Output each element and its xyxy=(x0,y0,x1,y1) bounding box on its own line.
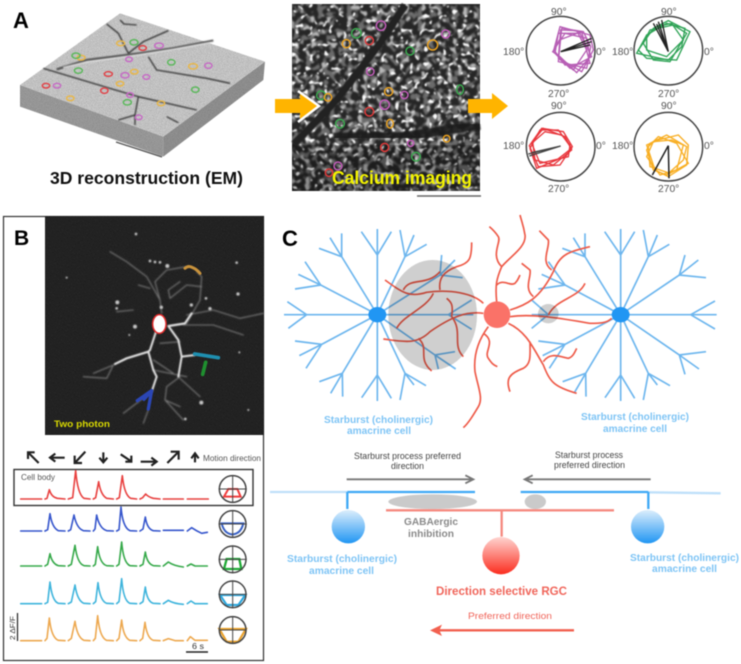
trace: green xyxy=(21,542,207,567)
top label: left starburst: amacrine cell xyxy=(347,426,411,437)
top label: right starburst xyxy=(581,412,689,435)
label: starburst process left xyxy=(354,451,461,471)
cell body highlight box xyxy=(14,470,253,506)
tuning icon: red xyxy=(219,475,247,503)
inhibition synapse: left xyxy=(388,494,477,509)
panel B frame xyxy=(4,216,264,660)
label: Cell body: Cell body xyxy=(21,472,56,482)
direction selective ganglion cell xyxy=(383,215,612,428)
label: lower right starburst: Starburst (cholinergic) xyxy=(630,553,739,564)
motion direction arrows xyxy=(28,452,199,466)
starburst processes xyxy=(270,492,721,509)
label B: B xyxy=(14,227,29,250)
label: Direction selective RGC: Direction selective RGC xyxy=(436,584,567,598)
label: lower right starburst: amacrine cell xyxy=(652,564,717,575)
dendrite schematic xyxy=(284,215,717,428)
starburst soma: left xyxy=(332,510,365,543)
label: starburst process right: Starburst process xyxy=(555,450,624,460)
circuit cross-section xyxy=(270,475,721,636)
polar angle labels: 0° xyxy=(596,141,606,152)
polar angle labels: 90° xyxy=(551,101,567,112)
two photon micrograph xyxy=(45,216,264,435)
caption: 3D reconstruction: 3D reconstruction (EM) xyxy=(50,168,243,188)
top label: left starburst: Starburst (cholinergic) xyxy=(324,415,433,426)
label: GABAergic inhibition: GABAergic xyxy=(404,516,458,528)
polar angle labels: 180° xyxy=(503,47,524,58)
cell body xyxy=(153,315,166,333)
trace: red cell body xyxy=(21,471,208,499)
inhibition zone: small xyxy=(538,304,559,323)
label: starburst process right xyxy=(554,450,625,470)
top label: left starburst xyxy=(324,415,433,437)
top label: right starburst: Starburst (cholinergic) xyxy=(581,412,689,423)
trace: blue xyxy=(21,507,207,533)
calcium scale bar xyxy=(417,195,481,197)
tuning icon: orange xyxy=(219,616,247,644)
calcium traces xyxy=(21,471,208,641)
tuning icons xyxy=(219,475,247,644)
label: starburst process left: Starburst process preferred xyxy=(354,451,461,461)
tuning icon: green xyxy=(219,545,247,573)
EM 3D block xyxy=(20,13,265,157)
inhibition synapse: right xyxy=(525,494,546,509)
label: starburst process left: direction xyxy=(391,461,424,471)
starburst cell: left xyxy=(284,229,473,401)
polar plot: orange xyxy=(634,112,703,181)
arrow: EM to calcium xyxy=(275,92,318,119)
caption: Two photon: Two photon xyxy=(54,419,110,430)
polar angle labels: 0° xyxy=(704,47,714,58)
label: lower left starburst: amacrine cell xyxy=(309,566,374,577)
label: 2 dF/F: 2 ΔF/F xyxy=(8,616,17,640)
polar angle labels: 180° xyxy=(612,47,633,58)
panel B xyxy=(4,216,264,660)
inhibition zone: large xyxy=(388,260,477,370)
label: Motion direction: Motion direction xyxy=(203,454,261,463)
caption: Calcium imaging: Calcium imaging xyxy=(332,168,472,188)
label: GABAergic inhibition: inhibition xyxy=(408,528,454,540)
RGC soma xyxy=(482,537,520,574)
trace: orange xyxy=(21,616,207,641)
calcium imaging micrograph xyxy=(292,4,480,191)
ROI: blue xyxy=(137,391,152,409)
polar angle labels: 180° xyxy=(612,141,633,152)
starburst soma: right xyxy=(631,510,664,543)
polar angle labels: 270° xyxy=(658,184,679,195)
ROI: green xyxy=(203,362,206,374)
ROI: orange xyxy=(185,266,200,273)
polar angle labels: 270° xyxy=(658,89,679,100)
polar angle labels: 180° xyxy=(503,141,524,152)
arrow: calcium to polar plots xyxy=(468,93,508,119)
label: lower left starburst: Starburst (cholinergic) xyxy=(287,554,397,565)
label A: A xyxy=(13,8,29,33)
EM scale bar xyxy=(116,142,162,157)
polar plot: green xyxy=(634,16,703,85)
scale bar: time xyxy=(186,651,208,653)
polar angle labels: 270° xyxy=(548,89,569,100)
ROI: cyan xyxy=(195,354,218,358)
polar plot: red xyxy=(526,112,595,181)
polar plots xyxy=(503,7,714,195)
polar plot: purple xyxy=(526,16,595,85)
label: lower left starburst xyxy=(287,554,397,577)
arrow: starburst preferred rightward xyxy=(347,475,473,483)
label C: C xyxy=(282,226,298,251)
polar angle labels: 0° xyxy=(704,141,714,152)
arrow: preferred direction xyxy=(430,625,574,636)
panel C xyxy=(270,215,739,636)
tuning icon: blue xyxy=(219,510,247,538)
label: starburst process right: preferred direction xyxy=(554,460,625,470)
tuning icon: cyan xyxy=(219,580,247,608)
polar angle labels xyxy=(503,7,714,195)
polar angle labels: 90° xyxy=(551,7,567,18)
label: Preferred direction: Preferred direction xyxy=(468,611,552,622)
label: GABAergic inhibition xyxy=(404,516,458,540)
polar angle labels: 90° xyxy=(661,7,677,18)
label: lower right starburst xyxy=(630,553,739,575)
starburst cell: right xyxy=(532,229,717,401)
polar angle labels: 0° xyxy=(596,47,606,58)
label: 6 s: 6 s xyxy=(192,641,204,651)
arrow: starburst preferred leftward xyxy=(525,475,651,483)
top label: right starburst: amacrine cell xyxy=(603,424,667,435)
polar angle labels: 270° xyxy=(548,184,569,195)
trace: cyan xyxy=(21,579,207,604)
panel A xyxy=(13,4,714,196)
scale bar: dF/F xyxy=(16,613,18,641)
arrow outline on image xyxy=(298,91,319,122)
polar angle labels: 90° xyxy=(661,101,677,112)
RGC dendrite xyxy=(386,510,614,537)
